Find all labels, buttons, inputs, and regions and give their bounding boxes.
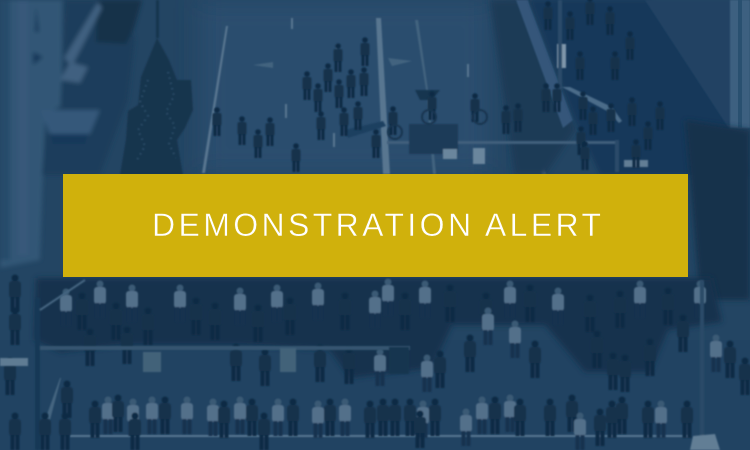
dense crowd: [4, 274, 750, 395]
left building: [0, 0, 142, 268]
banner title: DEMONSTRATION ALERT: [152, 207, 601, 243]
street lines and near signal mast: [0, 280, 720, 450]
front row of demonstrators: [9, 380, 693, 450]
banner: [63, 174, 688, 277]
tree: [120, 0, 193, 175]
right sidewalk and building: [490, 0, 750, 300]
cyclists and police group: [212, 0, 664, 172]
road markings: [202, 18, 546, 174]
traffic signal poles and signs: [345, 0, 648, 172]
